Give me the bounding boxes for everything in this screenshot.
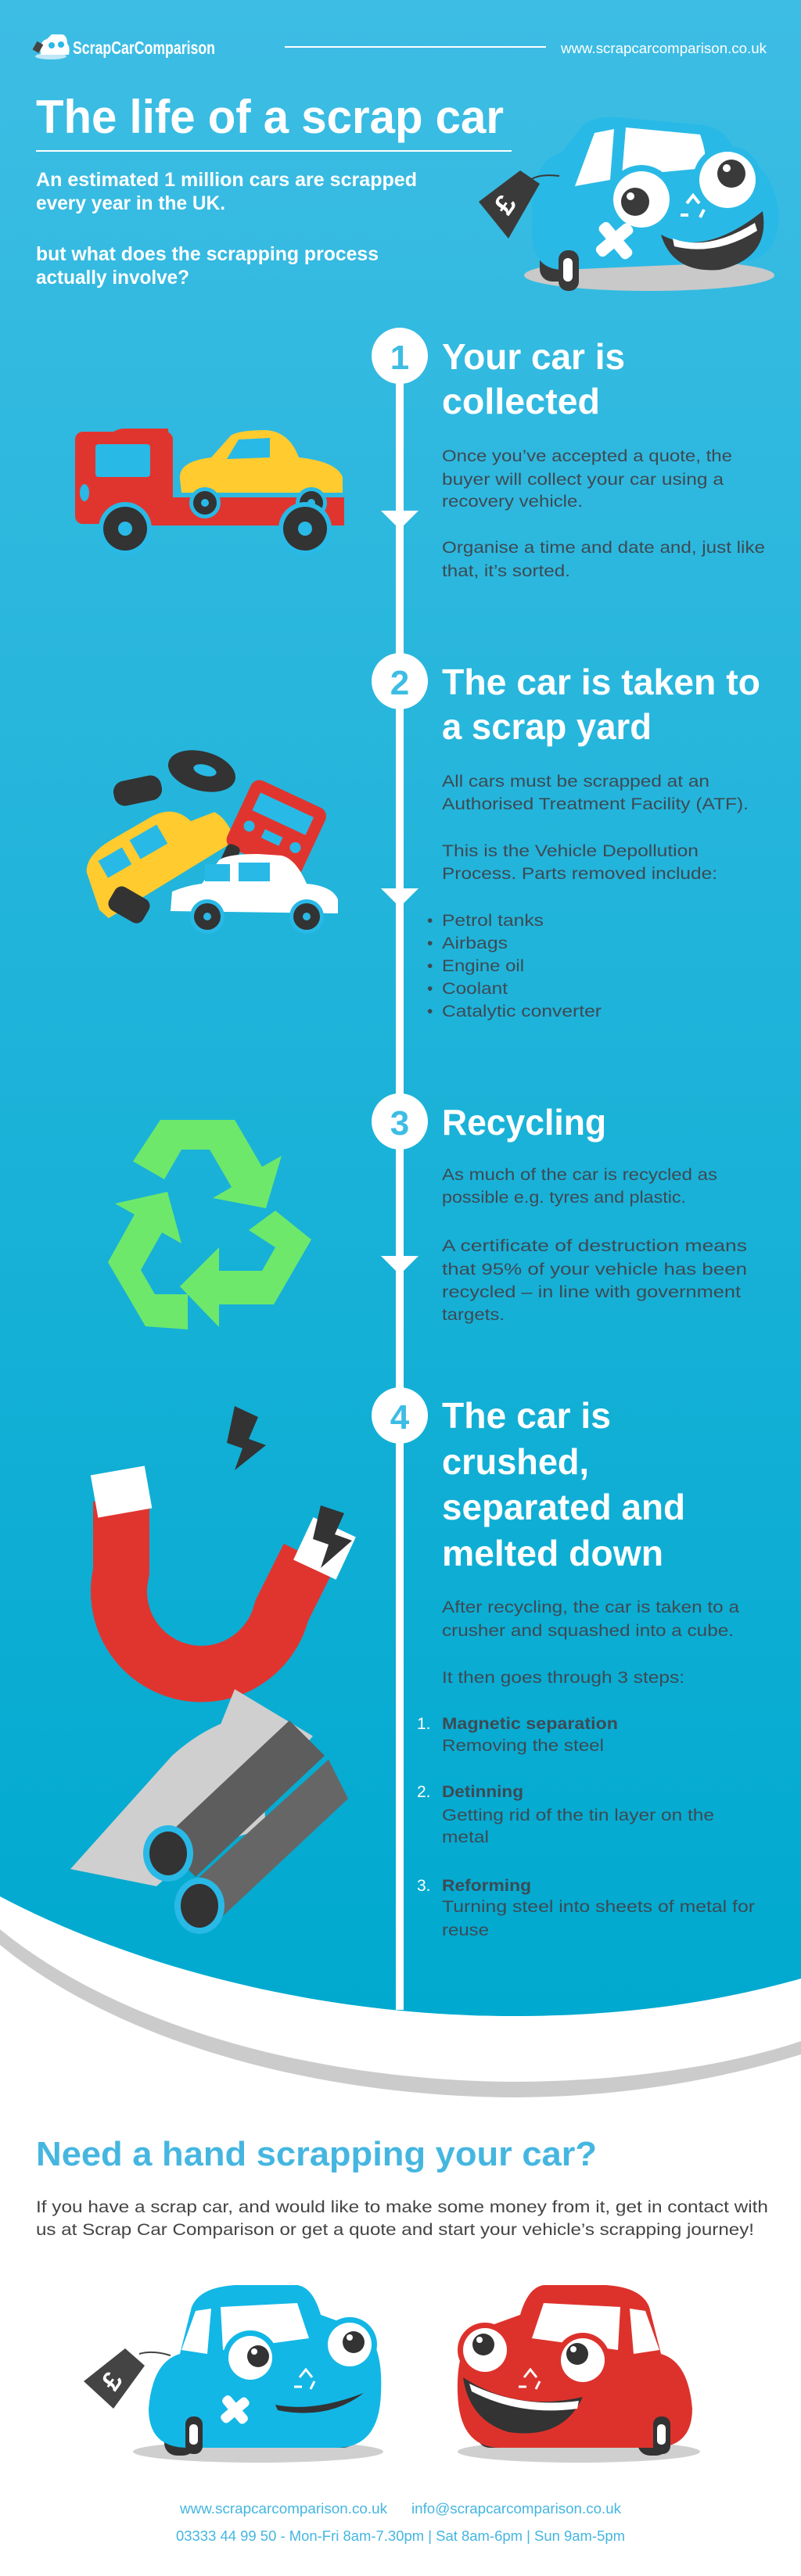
icon: number circle 3: 3 [390, 1104, 409, 1143]
cta paragraph: If you have a scrap car, and would like to make some money from it, get in contact with [36, 2198, 768, 2216]
icon: number circle 1 [372, 328, 428, 384]
text 4: metal [442, 1828, 489, 1846]
heading 4: crushed, [442, 1441, 589, 1482]
footer contact: 03333 44 99 50 - Mon-Fri 8am-7.30pm | Sat 8am-6pm | Sun 9am-5pm [176, 2528, 625, 2544]
text 1: recovery vehicle. [442, 493, 583, 511]
text 4: 1. [417, 1715, 431, 1733]
text 1: Organise a time and date and, just like [442, 539, 765, 557]
intro text: An estimated 1 million cars are scrapped [36, 169, 417, 191]
text 4: Removing the steel [442, 1737, 604, 1755]
header logo [33, 34, 215, 59]
text 3: As much of the car is recycled as [442, 1166, 717, 1184]
icon: tow truck [75, 429, 344, 555]
text 4: It then goes through 3 steps: [442, 1669, 684, 1687]
text 2: • [427, 935, 433, 953]
title: The life of a scrap car [36, 91, 504, 143]
text 2: Authorised Treatment Facility (ATF). [442, 795, 749, 813]
icon: hero mascot car [479, 117, 778, 291]
intro text: actually involve? [36, 267, 189, 289]
icon: red mascot car bottom [458, 2285, 700, 2463]
heading 4: The car is [442, 1395, 611, 1436]
step 4 [70, 1387, 755, 1939]
header logo: ScrapCarComparison [73, 38, 215, 58]
text 4 [417, 1598, 755, 1939]
step 1 [75, 328, 765, 580]
heading 4: melted down [442, 1533, 663, 1573]
text 2: • [427, 912, 433, 930]
text 1: Once you’ve accepted a quote, the [442, 447, 732, 465]
timeline line [396, 356, 404, 2010]
text 1: buyer will collect your car using a [442, 471, 724, 489]
text 2: This is the Vehicle Depollution [442, 842, 699, 860]
heading 1 [442, 336, 625, 422]
heading 4: separated and [442, 1487, 685, 1527]
text 4: After recycling, the car is taken to a [442, 1598, 739, 1616]
arrow 1 [381, 511, 418, 529]
text 2: • [427, 1003, 433, 1021]
intro text: but what does the scrapping process [36, 243, 379, 265]
cta paragraph: us at Scrap Car Comparison or get a quote and start your vehicle’s scrapping journey! [36, 2221, 754, 2239]
text 3: A certificate of destruction means [442, 1237, 747, 1255]
footer contact: www.scrapcarcomparison.co.uk [179, 2501, 388, 2517]
heading 3: Recycling [442, 1102, 606, 1143]
step 3 [108, 1093, 747, 1329]
text 1 [442, 447, 765, 580]
footer contact [176, 2501, 625, 2544]
text 1: that, it’s sorted. [442, 562, 570, 580]
blue background panel [0, 0, 801, 2016]
icon: magnet [91, 1406, 356, 1674]
cta heading: Need a hand scrapping your car? [36, 2135, 597, 2173]
text 3: that 95% of your vehicle has been [442, 1261, 747, 1279]
intro text: every year in the UK. [36, 192, 225, 214]
text 4: reuse [442, 1921, 489, 1939]
icon: recycle symbol [108, 1120, 311, 1329]
text 2: Catalytic converter [442, 1003, 602, 1021]
icon: hero mascot car: £ [487, 189, 523, 220]
text 4: Getting rid of the tin layer on the [442, 1806, 714, 1824]
text 4: crusher and squashed into a cube. [442, 1622, 734, 1640]
arrow 3 [381, 1256, 418, 1275]
step 2 [72, 653, 760, 1021]
arrow 2 [381, 888, 418, 907]
text 3: targets. [442, 1306, 505, 1324]
heading 1: collected [442, 381, 600, 422]
text 2: • [427, 980, 433, 998]
heading 4 [442, 1395, 685, 1573]
text 4: Magnetic separation [442, 1715, 618, 1733]
heading 2: a scrap yard [442, 706, 652, 747]
icon: blue mascot car bottom: £ [95, 2366, 128, 2396]
text 4: Turning steel into sheets of metal for [442, 1898, 755, 1916]
heading 2 [442, 662, 760, 747]
text 3 [442, 1166, 747, 1324]
icon: number circle 2: 2 [390, 664, 409, 702]
text 2: • [427, 957, 433, 975]
text 4: Reforming [442, 1877, 531, 1895]
footer contact: info@scrapcarcomparison.co.uk [411, 2501, 622, 2517]
text 2: Airbags [442, 935, 508, 953]
text 2: Petrol tanks [442, 912, 544, 930]
icon: number circle 4: 4 [390, 1398, 410, 1437]
intro text [36, 169, 417, 289]
heading 1: Your car is [442, 336, 625, 377]
text 4: Detinning [442, 1783, 523, 1801]
text 4: 3. [417, 1877, 431, 1895]
icon: number circle 4 [372, 1387, 428, 1444]
icon: scrap yard pile [72, 743, 338, 934]
icon: number circle 1: 1 [390, 339, 409, 377]
text 2: Coolant [442, 980, 508, 998]
text 4: 2. [417, 1783, 431, 1801]
icon: number circle 2 [372, 653, 428, 709]
text 3: recycled – in line with government [442, 1283, 741, 1301]
heading 2: The car is taken to [442, 662, 760, 702]
cta paragraph [36, 2198, 768, 2239]
text 2: Process. Parts removed include: [442, 865, 717, 883]
text 2: Engine oil [442, 957, 524, 975]
text 2 [427, 773, 749, 1021]
header url: www.scrapcarcomparison.co.uk [560, 41, 767, 56]
grey swoosh under blue panel [0, 1929, 801, 2097]
icon: blue mascot car bottom [84, 2285, 383, 2463]
icon: metal sheets and pipes [70, 1689, 348, 1934]
text 2: All cars must be scrapped at an [442, 773, 709, 791]
icon: number circle 3 [372, 1093, 428, 1150]
text 3: possible e.g. tyres and plastic. [442, 1189, 686, 1207]
